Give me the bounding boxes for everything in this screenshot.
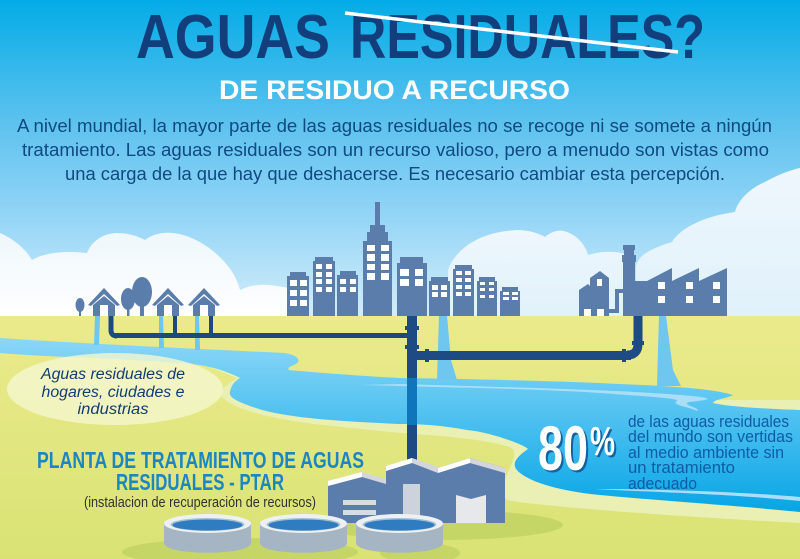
title strike-through [345,13,678,52]
sky background [0,0,800,320]
statistic description: un tratamiento [628,459,735,477]
treatment plant building [328,458,505,523]
intro paragraph: A nivel mundial, la mayor parte de las aguas residuales no se recoge ni se somete a ningún [17,115,772,136]
river [0,338,800,512]
icon: trees [76,277,152,316]
icon: houses [88,288,220,316]
statistic description: adecuado [628,475,697,493]
plant heading: PLANTA DE TRATAMIENTO DE AGUAS [37,447,364,473]
treatment tanks [164,514,443,553]
icon: factory [579,245,727,316]
subtitle: DE RESIDUO A RECURSO [219,75,570,105]
river highlights [360,384,800,501]
plant subheading: (instalacion de recuperación de recursos) [84,495,316,511]
intro paragraph [17,115,772,184]
cloud: left [0,233,290,318]
statistic description: del mundo son vertidas [628,428,793,446]
statistic description: de las aguas residuales [628,413,789,431]
intro paragraph: una carga de la que hay que deshacerse. Es necesario cambiar esta percepción. [65,163,725,184]
statistic: 80%: % [590,418,615,464]
statistic description [628,413,793,493]
callout text: industrias [78,401,149,418]
statistic: 80%: 80 [538,414,588,484]
intro paragraph: tratamiento. Las aguas residuales son un recurso valioso, pero a menudo son vistas como [22,139,769,160]
ground [0,316,800,559]
statistic description: al medio ambiente sin [628,444,784,462]
cloud: right [636,168,800,318]
callout ellipse [7,353,223,425]
icon: city skyline [287,202,520,316]
cloud: middle [448,230,640,318]
plant heading: RESIDUALES - PTAR [116,469,284,495]
callout text: hogares, ciudades e [42,384,185,401]
plant heading [37,447,364,495]
pipes [111,316,644,462]
callout text [40,366,185,418]
title: RESIDUALES? [350,3,705,72]
ground shadows [122,510,563,559]
title: AGUAS [136,3,330,72]
statistic: 80%: 80 [540,416,590,486]
streams [94,316,681,386]
title [136,3,705,72]
riverbank sand [207,366,800,523]
statistic: 80%: % [592,420,617,466]
callout text: Aguas residuales de [40,366,185,383]
